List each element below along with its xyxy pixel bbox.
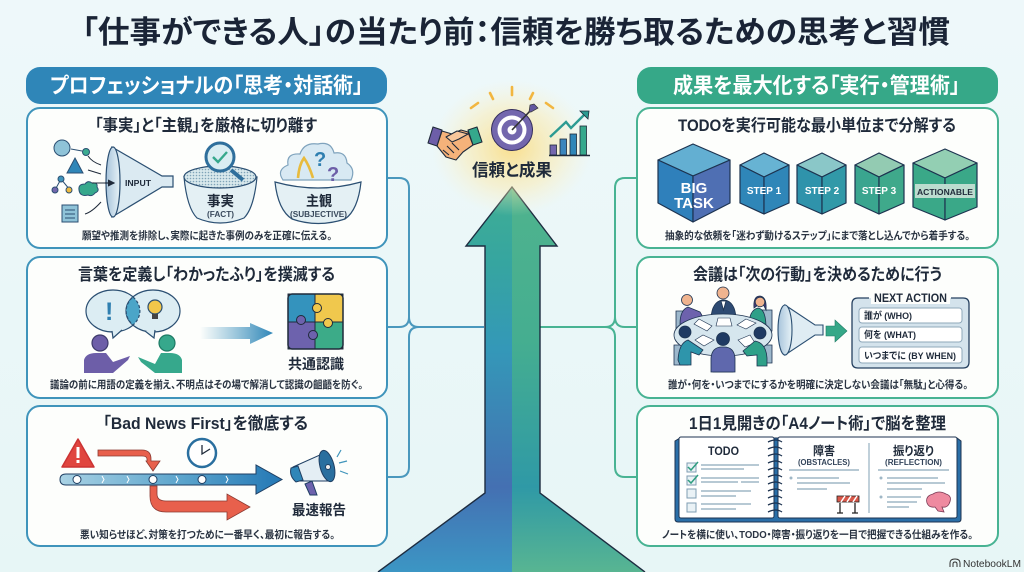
icon: step 2 cube: STEP 2 bbox=[805, 186, 840, 197]
back row people bbox=[680, 307, 708, 327]
next action checklist: いつまでに (BY WHEN) bbox=[864, 351, 956, 362]
todo page: TODO bbox=[708, 444, 739, 458]
icon: sparkle rays bbox=[471, 87, 553, 108]
icon: actionable cube: ACTIONABLE bbox=[917, 187, 973, 197]
icon: step 3 cube bbox=[855, 153, 904, 214]
reflection page: (REFLECTION) bbox=[885, 458, 942, 467]
icon: handshake bbox=[428, 127, 482, 160]
icon: fact bowl with magnifier bbox=[184, 143, 257, 223]
icon: opinion bowl with cloud: (SUBJECTIVE) bbox=[290, 210, 347, 219]
next action checklist bbox=[852, 291, 969, 368]
panel: break down todo bbox=[637, 108, 998, 248]
next action checklist: 誰が (WHO) bbox=[864, 310, 912, 322]
icon: clock bbox=[188, 439, 216, 467]
icon: two speakers with overlapping bubbles: ! bbox=[105, 298, 113, 326]
icon: opinion bowl with cloud: ? bbox=[314, 149, 326, 171]
icon: opinion bowl with cloud: ? bbox=[327, 164, 339, 186]
caption: 願望や推測を排除し、実際に起きた事例のみを正確に伝える。 bbox=[82, 229, 332, 242]
title: 「仕事ができる人」の当たり前：信頼を勝ち取るための思考と習慣 bbox=[82, 15, 950, 50]
icon: mixed input items bbox=[52, 140, 114, 222]
connectors: left branches bbox=[387, 178, 484, 477]
heading: 言葉を定義し「わかったふり」を撲滅する bbox=[78, 265, 335, 284]
arrow: escalated response bbox=[150, 486, 250, 520]
arrow bbox=[826, 320, 847, 342]
icon: big task cube bbox=[658, 144, 730, 222]
heading: 会議は「次の行動」を決めるために行う bbox=[693, 265, 942, 284]
icon: shared understanding puzzle bbox=[288, 294, 343, 349]
icon: opinion bowl with cloud bbox=[275, 143, 361, 224]
icon: actionable cube bbox=[913, 149, 977, 220]
reflection page bbox=[878, 444, 950, 512]
icon: opinion bowl with cloud: 主観 bbox=[306, 193, 332, 209]
label: trust and results: 信頼と成果 bbox=[472, 160, 552, 180]
caption: 議論の前に用語の定義を揃え、不明点はその場で解消して認識の齟齬を防ぐ。 bbox=[50, 378, 363, 391]
icon: input funnel bbox=[105, 147, 173, 217]
front row people bbox=[678, 340, 703, 365]
right column header: 成果を最大化する「実行・管理術」 bbox=[673, 74, 960, 98]
timeline arrow bbox=[60, 465, 282, 494]
icon: two speakers with overlapping bubbles bbox=[84, 290, 182, 373]
reflection page: 振り返り bbox=[893, 444, 934, 458]
icon: growth chart bbox=[549, 111, 590, 156]
icon: fact bowl with magnifier: (FACT) bbox=[207, 210, 234, 219]
panel: separate fact and opinion bbox=[27, 108, 387, 248]
left column header: プロフェッショナルの「思考・対話術」 bbox=[50, 74, 363, 98]
heading: 1日1見開きの「A4ノート術」で脳を整理 bbox=[689, 414, 946, 433]
table bbox=[674, 314, 772, 356]
todo page bbox=[687, 444, 759, 512]
obstacles page: (OBSTACLES) bbox=[798, 458, 850, 467]
icon: step 1 cube bbox=[740, 153, 789, 214]
icon: fact bowl with magnifier: 事実 bbox=[207, 193, 234, 209]
heading: 「事実」と「主観」を厳格に切り離す bbox=[95, 115, 317, 135]
papers bbox=[694, 318, 756, 347]
icon: target bbox=[492, 104, 538, 150]
icon: megaphone bbox=[291, 449, 348, 495]
right column header bbox=[637, 67, 998, 104]
left column header bbox=[26, 67, 387, 104]
label: fastest report: 最速報告 bbox=[292, 502, 346, 518]
caption: 抽象的な依頼を「迷わず動けるステップ」にまで落とし込んでから着手する。 bbox=[665, 229, 970, 242]
panel: meeting decides next action bbox=[637, 257, 998, 398]
next action checklist: NEXT ACTION bbox=[874, 291, 947, 305]
caption: 誰が・何を・いつまでにするかを明確に決定しない会議は「無駄」と心得る。 bbox=[668, 378, 968, 391]
central upward arrow bbox=[378, 187, 645, 572]
panel: bad news first bbox=[27, 406, 387, 546]
icon: step 2 cube bbox=[797, 153, 846, 214]
icon: input funnel: INPUT bbox=[125, 179, 151, 188]
icon: people around meeting table bbox=[674, 287, 772, 372]
panel: a4 note method bbox=[637, 406, 998, 546]
icon: big task cube: TASK bbox=[674, 195, 714, 212]
caption: ノートを横に使い、TODO・障害・振り返りを一目で把握できる仕組みを作る。 bbox=[662, 528, 973, 541]
icon: warning triangle bbox=[62, 439, 94, 467]
obstacles page: 障害 bbox=[813, 443, 835, 458]
icon: open notebook bbox=[675, 437, 961, 522]
arrow: bad news routed to timeline bbox=[98, 450, 160, 471]
label: common understanding: 共通認識 bbox=[288, 356, 344, 372]
icon: step 3 cube: STEP 3 bbox=[862, 186, 897, 197]
NotebookLM watermark: NotebookLM bbox=[963, 559, 1021, 570]
connectors: right branches bbox=[540, 178, 637, 477]
panel: define words bbox=[27, 257, 387, 398]
obstacles page bbox=[789, 443, 859, 513]
heading: 「Bad News First」を徹底する bbox=[103, 414, 308, 433]
heading: TODOを実行可能な最小単位まで分解する bbox=[678, 115, 956, 135]
arrow bbox=[200, 323, 273, 344]
goal: trust and results bbox=[428, 80, 592, 216]
icon: step 1 cube: STEP 1 bbox=[747, 186, 782, 197]
icon: next action funnel bbox=[778, 305, 823, 355]
chairs bbox=[674, 310, 772, 372]
next action checklist: 何を (WHAT) bbox=[864, 329, 916, 341]
caption: 悪い知らせほど、対策を打つために一番早く、最初に報告する。 bbox=[80, 528, 335, 541]
icon: big task cube: BIG bbox=[681, 180, 707, 197]
